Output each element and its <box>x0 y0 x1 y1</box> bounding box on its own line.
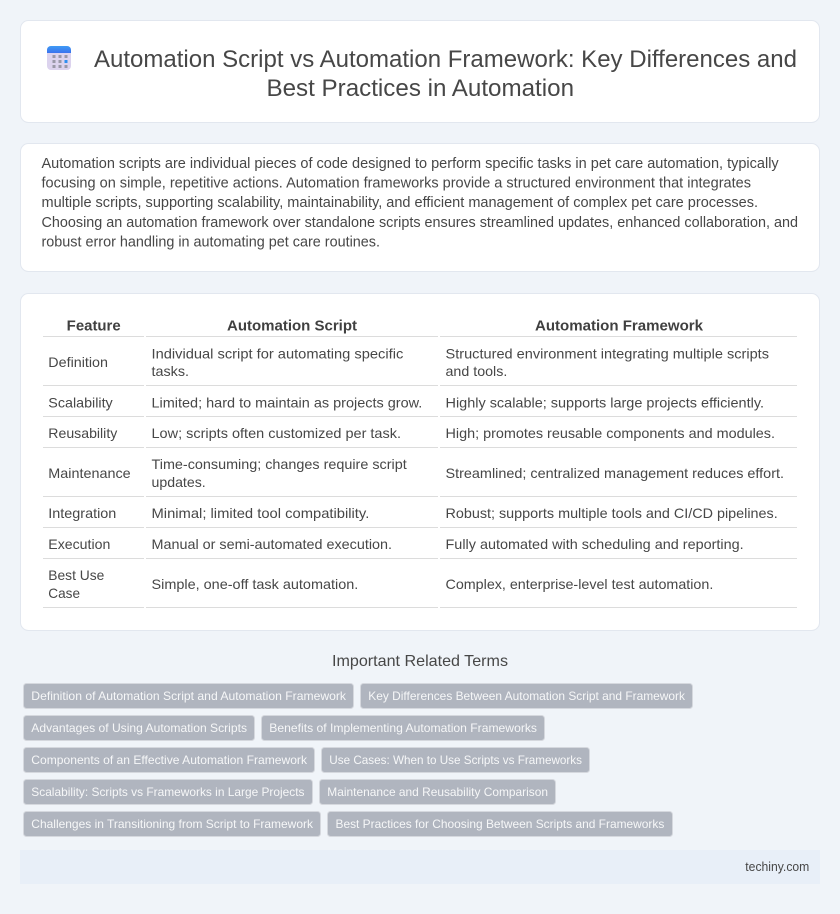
icon: calendar <box>47 46 71 70</box>
panel: intro paragraph: Choosing an automation framework over standalone scripts ensures streamlined updates, enhanced collaboration, and <box>42 215 798 231</box>
row: maintenance <box>48 456 784 490</box>
panel: intro paragraph <box>20 144 820 272</box>
row: definition: tasks. <box>152 363 189 379</box>
row: best use case <box>48 567 713 601</box>
row: execution: Fully automated with scheduling and reporting. <box>446 536 744 552</box>
table header <box>67 319 704 335</box>
row: integration <box>48 505 778 521</box>
title: Best Practices in Automation <box>266 75 574 102</box>
row: integration: Minimal; limited tool compatibility. <box>152 505 369 521</box>
row: definition: and tools. <box>446 363 507 379</box>
tag <box>24 812 320 836</box>
table header: Automation Script <box>227 319 357 335</box>
row: execution: Manual or semi-automated execution. <box>152 536 392 552</box>
tag <box>24 780 312 804</box>
row: scalability: Highly scalable; supports large projects efficiently. <box>446 394 764 410</box>
tag: Use Cases: When to Use Scripts vs Frameworks <box>329 753 582 767</box>
tag <box>262 716 544 740</box>
title: Automation Script vs Automation Framework: Key Differences and <box>94 46 797 73</box>
panel: comparison table <box>20 294 820 630</box>
tag: Components of an Effective Automation Framework <box>31 753 308 767</box>
row: definition: Individual script for automating specific <box>152 345 403 361</box>
panel: intro paragraph: robust error handling in automating pet care routines. <box>42 234 380 250</box>
tag <box>24 748 314 772</box>
row: best use case: Simple, one-off task automation. <box>152 576 358 592</box>
panel: intro paragraph: Automation scripts are individual pieces of code designed to perform specific tasks in pet care automation, typically <box>42 156 779 172</box>
table header: Automation Framework <box>535 319 704 335</box>
panel: intro paragraph: focusing on simple, repetitive actions. Automation frameworks provide a structured environment that integrates <box>42 176 751 192</box>
row: maintenance: Time-consuming; changes require script <box>152 456 407 472</box>
footer <box>20 850 820 884</box>
row: integration: Robust; supports multiple tools and CI/CD pipelines. <box>446 505 778 521</box>
tag <box>24 684 354 708</box>
tag <box>328 812 672 836</box>
tag: Scalability: Scripts vs Frameworks in Large Projects <box>31 785 305 799</box>
row: scalability: Limited; hard to maintain as projects grow. <box>152 394 422 410</box>
tag <box>360 684 692 708</box>
row: reusability <box>48 425 775 441</box>
row: definition: Definition <box>48 354 108 370</box>
row: definition: Structured environment integrating multiple scripts <box>446 345 769 361</box>
tag: Challenges in Transitioning from Script to Framework <box>31 817 314 831</box>
tag <box>320 780 556 804</box>
row: execution <box>48 536 744 552</box>
row: best use case: Complex, enterprise-level test automation. <box>446 576 713 592</box>
tag: Benefits of Implementing Automation Frameworks <box>269 721 537 735</box>
footer: techiny.com <box>745 860 809 874</box>
title <box>94 46 797 102</box>
row: maintenance: Streamlined; centralized management reduces effort. <box>446 465 784 481</box>
row: best use case: Best Use <box>48 567 104 583</box>
row: integration: Integration <box>48 505 116 521</box>
related term tags <box>24 684 692 836</box>
row: execution: Execution <box>48 536 110 552</box>
row: reusability: Reusability <box>48 425 117 441</box>
panel: intro paragraph: multiple scripts, supporting scalability, maintainability, and efficient management of complex pet care processes. <box>42 195 758 211</box>
row: maintenance: Maintenance <box>48 465 131 481</box>
row: scalability: Scalability <box>48 394 113 410</box>
tag <box>322 748 590 772</box>
row: scalability <box>48 394 764 410</box>
tag: Best Practices for Choosing Between Scripts and Frameworks <box>336 817 664 831</box>
row: maintenance: updates. <box>152 474 206 490</box>
tag: Maintenance and Reusability Comparison <box>327 785 548 799</box>
row: best use case: Case <box>48 585 80 601</box>
row: reusability: Low; scripts often customized per task. <box>152 425 401 441</box>
panel: title header <box>20 20 820 122</box>
heading: important related terms: Important Related Terms <box>332 653 508 670</box>
tag: Definition of Automation Script and Automation Framework <box>31 689 347 703</box>
tag: Advantages of Using Automation Scripts <box>31 721 247 735</box>
table header: Feature <box>67 319 121 335</box>
row: reusability: High; promotes reusable components and modules. <box>446 425 775 441</box>
tag <box>24 716 254 740</box>
row: definition <box>48 345 769 379</box>
tag: Key Differences Between Automation Script and Framework <box>368 689 686 703</box>
